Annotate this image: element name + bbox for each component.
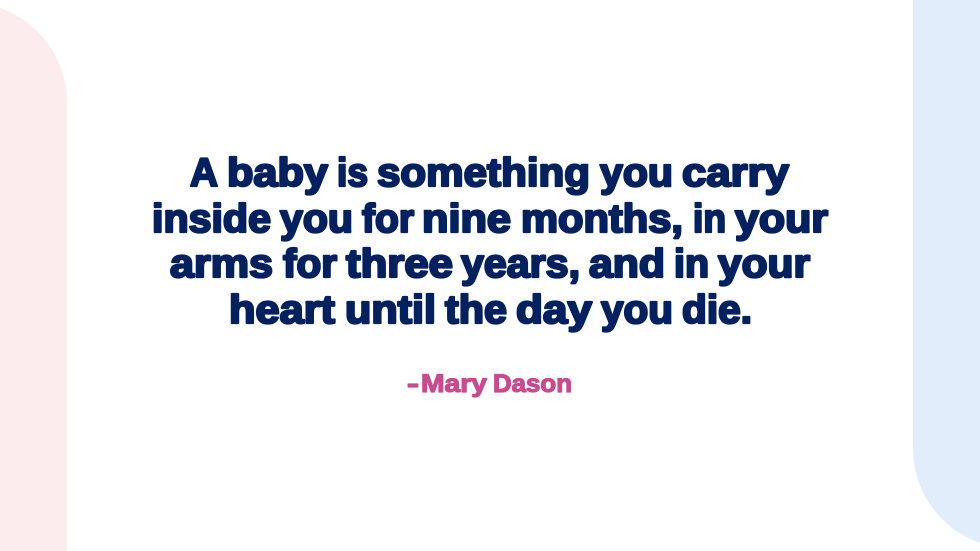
quote line 1: carry bbox=[682, 151, 789, 195]
attribution: - bbox=[407, 370, 419, 398]
quote line 3: three bbox=[346, 242, 453, 286]
quote line 1: something bbox=[377, 151, 590, 195]
quote line 2: your bbox=[735, 197, 828, 241]
quote line 4: heart bbox=[229, 288, 335, 332]
quote line 4: the bbox=[445, 288, 507, 332]
quote line 3 bbox=[170, 242, 810, 286]
quote line 3: arms bbox=[170, 242, 273, 286]
quote line 2: you bbox=[280, 197, 353, 241]
quote line 2: for bbox=[362, 197, 414, 241]
quote line 4: day bbox=[516, 288, 592, 332]
quote line 4: you bbox=[601, 288, 673, 332]
quote line 3: and bbox=[589, 242, 665, 286]
quote line 2: nine bbox=[422, 197, 511, 241]
quote line 3: years, bbox=[461, 242, 580, 286]
quote line 3: for bbox=[283, 242, 337, 286]
panel: blue rounded shape, right bbox=[913, 0, 980, 543]
quote line 3: in bbox=[674, 242, 709, 286]
quote line 4 bbox=[229, 288, 752, 332]
quote line 1: you bbox=[600, 151, 673, 195]
attribution: Dason bbox=[493, 370, 572, 398]
quote line 1 bbox=[190, 151, 789, 195]
quote line 2: months, bbox=[521, 197, 683, 241]
attribution bbox=[407, 370, 572, 398]
quote line 4: until bbox=[345, 288, 436, 332]
quote line 2 bbox=[152, 197, 828, 241]
quote line 1: baby bbox=[227, 151, 328, 195]
quote text bbox=[152, 151, 828, 332]
quote line 2: inside bbox=[152, 197, 271, 241]
attribution: Mary bbox=[421, 370, 487, 398]
quote line 1: A bbox=[190, 151, 218, 195]
quote line 1: is bbox=[337, 151, 368, 195]
panel: pink rounded shape, left bbox=[0, 8, 67, 551]
quote line 3: your bbox=[718, 242, 810, 286]
quote line 4: die. bbox=[682, 288, 752, 332]
quote line 2: in bbox=[693, 197, 726, 241]
